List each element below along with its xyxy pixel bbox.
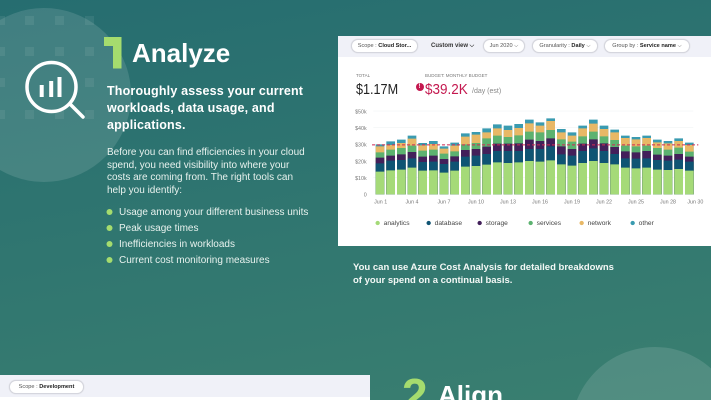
bullet list: Inefficiencies in workloads — [119, 239, 235, 250]
intro paragraph: spend, you need visibility into where your — [107, 160, 289, 170]
panel: development dashboard — [0, 375, 370, 400]
alert icon — [416, 83, 424, 91]
alert icon: ! — [418, 84, 420, 90]
chart caption: of your spend on a continual basis. — [353, 274, 512, 286]
budget line — [372, 143, 698, 146]
legend: other — [639, 220, 655, 227]
filter: group by — [604, 39, 690, 53]
legend: analytics — [384, 220, 410, 227]
x axis labels: Jun 4 — [405, 200, 419, 206]
y axis labels: $30k — [355, 143, 367, 149]
legend — [376, 220, 655, 227]
filter: granularity — [532, 39, 598, 53]
x axis labels: Jun 19 — [564, 200, 580, 206]
subheading: workloads, data usage, and — [107, 101, 275, 115]
subheading: applications. — [107, 118, 186, 132]
intro paragraph: costs are coming from. The right tools can — [107, 172, 293, 183]
filter: custom view: Custom view ⌵ — [431, 43, 474, 49]
chart caption — [353, 262, 614, 286]
subheading — [107, 84, 303, 132]
filter: scope: Scope : Cloud Stor... — [358, 43, 411, 49]
subheading: Thoroughly assess your current — [107, 84, 303, 98]
toolbar — [0, 375, 370, 397]
panel: cost analysis dashboard — [338, 36, 711, 246]
x axis labels: Jun 22 — [596, 200, 612, 206]
y axis labels: 0 — [364, 192, 367, 198]
x axis labels: Jun 25 — [628, 200, 644, 206]
filter: granularity: Granularity : Daily ⌵ — [539, 43, 591, 49]
intro paragraph: help you identify: — [107, 184, 182, 196]
bullet list: Usage among your different business units — [119, 207, 308, 218]
legend: services — [537, 220, 562, 227]
filter: scope development: Scope : Development — [19, 384, 74, 390]
total label: TOTAL — [356, 73, 370, 78]
x axis labels: Jun 13 — [500, 200, 516, 206]
heading: Analyze: Analyze — [132, 38, 230, 68]
bullet list — [106, 207, 308, 266]
budget value: $39.2K — [425, 82, 468, 98]
filter: group by: Group by : Service name ⌵ — [612, 43, 682, 49]
filter: date — [483, 39, 525, 53]
total value: $1.17M — [356, 82, 398, 98]
x axis labels: Jun 30 — [687, 200, 703, 206]
x axis labels — [374, 200, 703, 206]
filter: date: Jun 2020 ⌵ — [490, 43, 518, 49]
budget unit: /day (est) — [472, 88, 501, 94]
y axis labels: $20k — [355, 159, 367, 165]
legend: storage — [486, 220, 508, 227]
y axis labels: $40k — [355, 126, 367, 132]
legend: network — [588, 220, 612, 227]
stacked bars — [380, 118, 689, 194]
toolbar — [338, 36, 711, 57]
bullet list: Peak usage times — [119, 223, 198, 234]
x axis labels: Jun 1 — [374, 200, 387, 206]
x axis labels: Jun 7 — [437, 200, 451, 206]
stacked bar chart — [355, 109, 704, 227]
budget label: BUDGET: MONTHLY BUDGET — [425, 73, 487, 78]
step number 1 — [104, 37, 122, 68]
x axis labels: Jun 28 — [660, 200, 676, 206]
x axis labels: Jun 10 — [468, 200, 484, 206]
filter: scope development — [9, 380, 84, 394]
filter: scope — [351, 39, 418, 53]
bullet list: Current cost monitoring measures — [119, 255, 270, 266]
chart caption: You can use Azure Cost Analysis for detailed breakdowns — [353, 262, 614, 273]
icon: magnifying glass with bars — [25, 60, 85, 119]
y axis labels: $10k — [355, 176, 367, 182]
intro paragraph — [107, 147, 305, 196]
y axis labels: $50k — [355, 109, 367, 115]
intro paragraph: Before you can find efficiencies in your cloud — [107, 147, 305, 158]
legend: database — [435, 220, 462, 227]
x axis labels: Jun 16 — [532, 200, 548, 206]
y axis labels — [355, 109, 367, 198]
